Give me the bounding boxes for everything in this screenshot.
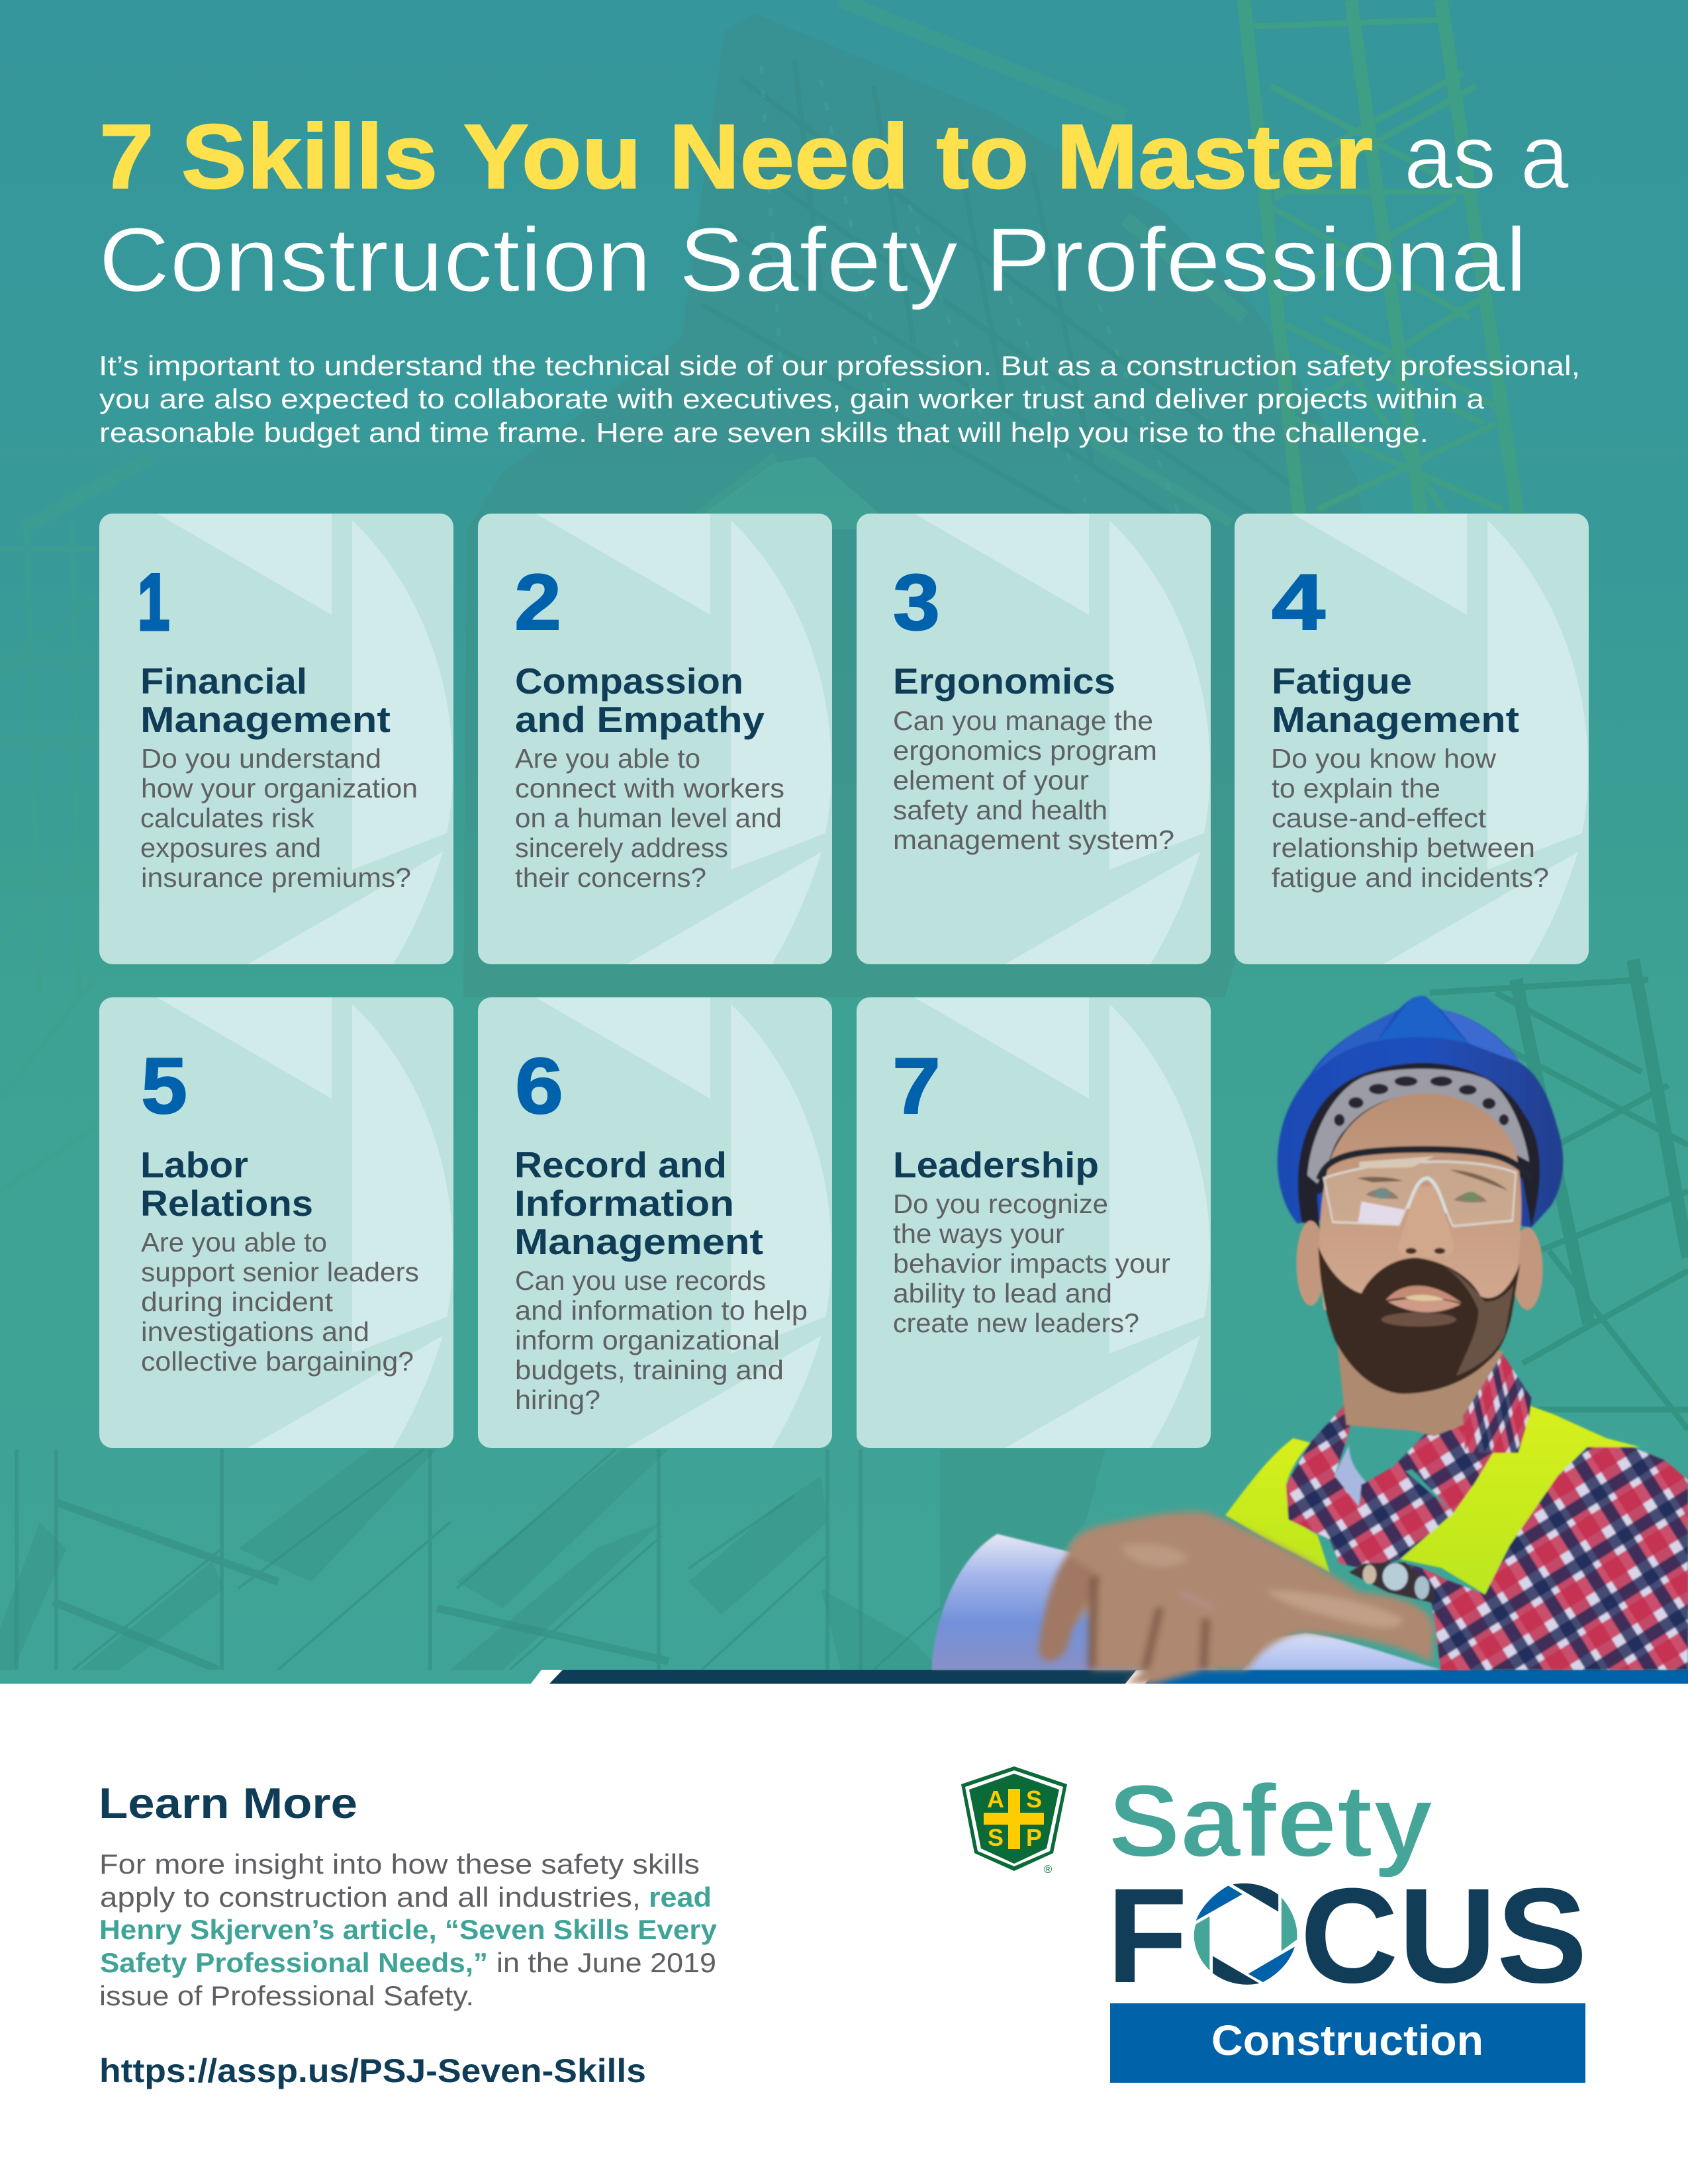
panel: skill 2 compassion and empathy [478,514,832,964]
heading [515,660,765,740]
number 1: 1 [138,558,169,647]
ears [1296,1220,1543,1310]
illustration: construction worker with hard hat holding plans [931,996,1688,1684]
teal photo background [0,0,1688,1670]
learn more heading: Learn More [99,1779,357,1827]
icon: ASSP shield logo: P [1026,1824,1042,1851]
icon: ASSP shield logo: ® [1044,1863,1053,1876]
heading: Record and [514,1144,727,1185]
description: Do you recognize [893,1189,1108,1219]
panel: skill 5 labor relations [99,997,453,1448]
learn more text: in the June 2019 [496,1947,716,1978]
torso, vest and shirt [1225,1403,1688,1670]
intro paragraph: reasonable budget and time frame. Here are seven skills that will help you rise to the challenge. [99,417,1429,448]
description: connect with workers [515,773,784,803]
blueprint roll [931,1534,1441,1670]
number 6: 6 [515,1042,563,1130]
number 5: 5 [141,1042,187,1130]
icon: ASSP shield logo [961,1766,1067,1876]
heading: Ergonomics [893,660,1115,702]
panel: skill 3 ergonomics [857,514,1211,964]
heading: Relations [140,1183,313,1224]
panel: skill 6 record and information management [478,997,832,1448]
description: behavior impacts your [893,1248,1170,1279]
safety glasses [1319,1150,1531,1226]
number 3: 3 [893,558,940,647]
heading: Management [514,1221,763,1262]
number 4: 4 [1272,558,1325,647]
description: how your organization [141,773,418,803]
icon: ASSP shield logo: S [1026,1786,1042,1813]
heading [1272,660,1519,740]
mouth [1385,1286,1462,1312]
learn more text: read [649,1882,712,1913]
head with hard hat and safety glasses [1278,996,1563,1453]
header title: as a [1404,106,1569,208]
learn more text [99,1848,718,2011]
heading: Labor [140,1144,248,1185]
panel: skill 4 fatigue management [1235,514,1589,964]
description: investigations and [141,1316,369,1347]
learn more text: Henry Skjerven’s article, “Seven Skills Every [99,1914,718,1945]
logo: FOCUS wordmark [1107,1860,1587,2011]
panel: skill 7 leadership [857,997,1211,1448]
description: management system? [893,825,1174,855]
heading: Compassion [515,660,743,702]
header title: Construction Safety Professional [99,209,1527,311]
description [893,1189,1170,1338]
description: calculates risk [140,803,314,833]
learn more text: Safety Professional Needs,” [100,1947,488,1978]
logo: Safety wordmark: Safety [1108,1764,1433,1879]
heading: Information [514,1183,734,1224]
description: the ways your [893,1218,1064,1249]
intro paragraph: It’s important to understand the technical side of our profession. But as a construction safety professional, [99,350,1580,381]
heading [140,1144,313,1224]
number 7: 7 [892,1042,941,1130]
description: Can you use records [515,1265,766,1296]
learn more text: issue of Professional Safety. [99,1980,474,2011]
nose [1403,1187,1450,1255]
description: Do you know how [1271,743,1496,774]
description: cause-and-effect [1272,803,1487,833]
wristwatch and cuff [1349,1563,1495,1670]
description: during incident [141,1287,334,1317]
description: element of your [893,765,1089,796]
header title [99,106,1569,311]
divider bar [0,1670,1688,1684]
description: Can you manage the [893,705,1153,736]
header title: 7 Skills You Need to Master [99,106,1373,208]
description: hiring? [515,1385,600,1415]
logo: FOCUS wordmark: CUS [1300,1860,1587,2011]
description [140,743,418,893]
description: Do you understand [141,743,381,774]
description: sincerely address [515,833,728,863]
article url: https://assp.us/PSJ-Seven-Skills [99,2052,646,2089]
logo: FOCUS wordmark: F [1107,1860,1188,2011]
description: inform organizational [515,1325,780,1355]
description: collective bargaining? [141,1346,414,1377]
description: safety and health [893,795,1107,825]
description: on a human level and [515,803,782,833]
heading: Financial [140,660,307,702]
panel: skill 1 financial management [99,514,453,964]
description [515,1265,808,1415]
description: Are you able to [141,1227,327,1257]
arm and hand [1039,1512,1434,1684]
learn more text: apply to construction and all industries, [100,1882,641,1913]
description: support senior leaders [141,1257,419,1287]
description: Are you able to [515,743,700,774]
description [141,1227,419,1377]
hat shell [1278,996,1563,1228]
heading: Leadership [893,1144,1099,1185]
heading: Fatigue [1272,660,1412,702]
collar [1463,1354,1531,1453]
intro paragraph: you are also expected to collaborate with executives, gain worker trust and deliver projects within a [99,383,1485,414]
heading [140,660,391,740]
description: their concerns? [515,862,706,893]
description [515,743,784,893]
description: ability to lead and [893,1278,1112,1308]
suspension band [1307,1069,1529,1184]
logo: construction banner: Construction [1211,2017,1483,2064]
description: fatigue and incidents? [1272,862,1549,893]
under brim shade [1298,1063,1540,1228]
beard [1319,1247,1521,1394]
learn more text: For more insight into how these safety skills [99,1848,700,1880]
heading: Management [140,699,391,740]
description: create new leaders? [893,1308,1139,1338]
description: exposures and [140,833,321,863]
icon: ASSP shield logo: S [988,1824,1004,1851]
logo: construction banner [1110,2003,1585,2083]
icon: ASSP shield logo: A [987,1786,1004,1813]
description: relationship between [1272,833,1535,863]
description: ergonomics program [893,735,1157,766]
description [1271,743,1549,893]
heading [514,1144,763,1262]
number 2: 2 [514,558,561,647]
description: and information to help [515,1295,808,1326]
description: to explain the [1272,773,1440,803]
description [893,705,1174,855]
neck [1337,1343,1504,1436]
intro paragraph [99,350,1580,448]
heading: and Empathy [515,699,765,740]
description: insurance premiums? [141,862,411,893]
face [1320,1093,1521,1310]
heading: Management [1272,699,1519,740]
description: budgets, training and [515,1355,784,1385]
logo: FOCUS wordmark: O [1198,1860,1291,2011]
